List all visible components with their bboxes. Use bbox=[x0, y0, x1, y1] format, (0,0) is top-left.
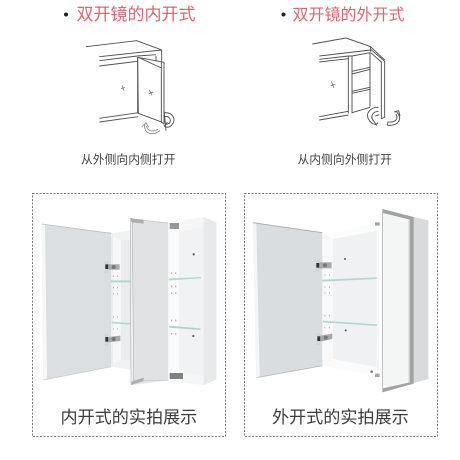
left door inner face bbox=[42, 224, 111, 380]
mirror door bbox=[382, 209, 414, 392]
caption: inside to outside: 从内侧向外侧打开 bbox=[298, 152, 392, 166]
left door inner face bbox=[253, 223, 322, 378]
caption: inward photo: 内开式的实拍展示 bbox=[60, 408, 197, 427]
heading: inward opening: 双开镜的内开式 bbox=[76, 5, 196, 24]
lower hinge bbox=[316, 333, 332, 345]
dashed frame bbox=[244, 194, 438, 436]
caption: outside to inside: 从外侧向内侧打开 bbox=[81, 152, 176, 166]
photo: outward opening cabinet bbox=[253, 209, 428, 392]
upper hinge bbox=[104, 261, 120, 273]
left shelves bbox=[111, 280, 131, 282]
center folded door bbox=[130, 218, 168, 385]
panel: outward opening photo bbox=[244, 194, 438, 436]
bullet: outward heading bbox=[282, 12, 286, 16]
upper hinge bbox=[315, 260, 332, 272]
bullet: inward heading bbox=[64, 12, 68, 16]
lower hinge bbox=[104, 334, 120, 346]
diagram: outward opening cabinet bbox=[312, 38, 400, 125]
panel: outward opening diagram bbox=[282, 5, 405, 166]
peg holes bbox=[113, 276, 118, 330]
dashed frame bbox=[32, 194, 226, 436]
shelves bbox=[322, 277, 377, 282]
photo: inward opening cabinet bbox=[42, 217, 216, 385]
heading: outward opening: 双开镜的外开式 bbox=[292, 5, 405, 24]
right shelves bbox=[169, 277, 201, 280]
cabinet interior bbox=[322, 223, 379, 376]
panel: inward opening diagram bbox=[64, 5, 196, 166]
right cabinet body bbox=[168, 217, 216, 385]
cabinet interior left bbox=[111, 230, 132, 370]
caption: outward photo: 外开式的实拍展示 bbox=[272, 408, 409, 427]
diagram: inward opening cabinet bbox=[86, 41, 174, 134]
outer side panel bbox=[412, 216, 428, 384]
panel: inward opening photo bbox=[32, 194, 226, 436]
